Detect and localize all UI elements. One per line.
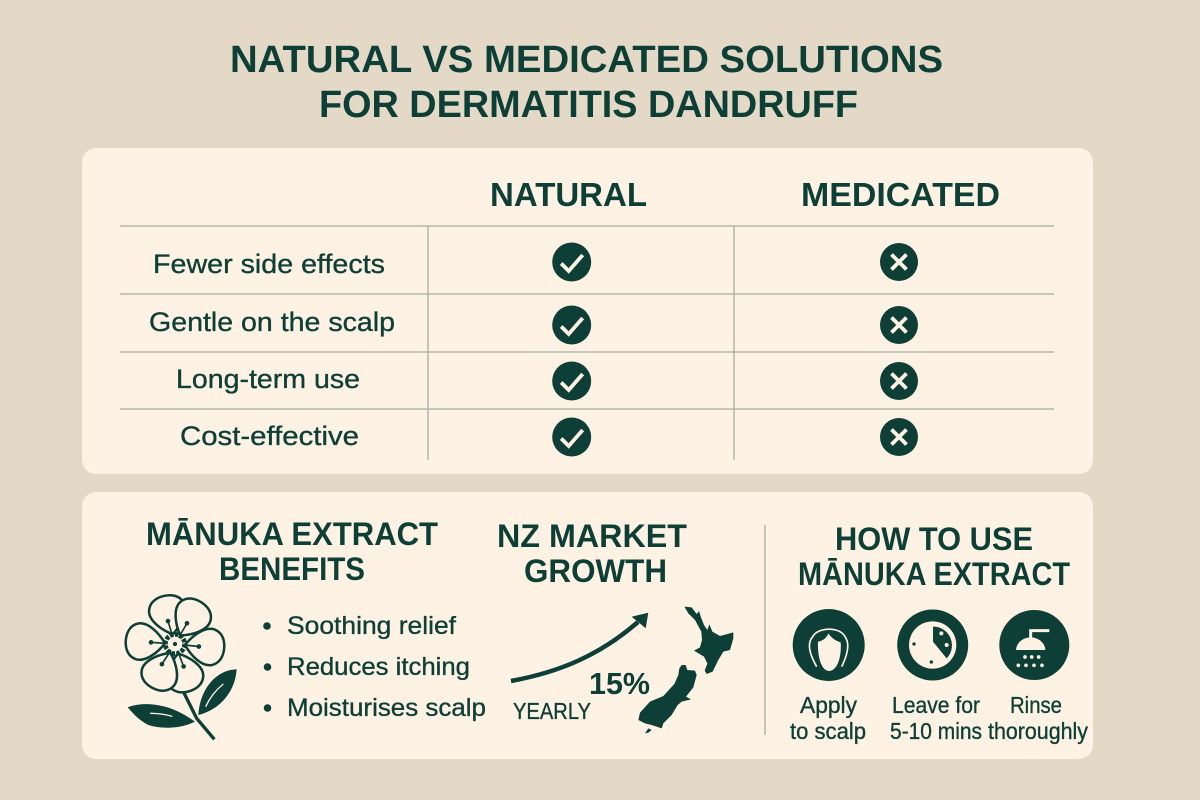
step: leave for 5-10 mins (890, 610, 982, 744)
row: gentle on the scalp: Gentle on the scalp (149, 307, 395, 337)
panel: bottom section (82, 492, 1093, 759)
row: fewer side effects: Fewer side effects (153, 249, 385, 279)
list: benefits: Reduces itching (287, 653, 470, 681)
heading: how to use manuka extract: MĀNUKA EXTRACT (798, 556, 1070, 592)
title: FOR DERMATITIS DANDRUFF (319, 84, 858, 126)
column heading: medicated: MEDICATED (801, 176, 1000, 213)
arrow: growth (511, 613, 648, 681)
step: rinse thoroughly: thoroughly (988, 718, 1088, 744)
row: cost-effective (180, 418, 918, 456)
list: benefits: Soothing relief (287, 612, 456, 640)
list: benefits: Moisturises scalp (287, 694, 486, 722)
label: yearly: YEARLY (513, 698, 591, 724)
row: long-term use (176, 362, 918, 400)
heading: nz market growth: NZ MARKET (497, 518, 687, 554)
heading: nz market growth: GROWTH (524, 553, 667, 589)
step: rinse thoroughly (988, 610, 1088, 744)
heading: how to use manuka extract: HOW TO USE (835, 521, 1033, 557)
step: apply to scalp: to scalp (790, 718, 866, 744)
step: rinse thoroughly: Rinse (1010, 692, 1062, 718)
step: leave for 5-10 mins: Leave for (892, 692, 980, 718)
row: fewer side effects (153, 242, 918, 282)
heading: manuka extract benefits: BENEFITS (219, 551, 365, 587)
step: apply to scalp: Apply (800, 692, 857, 718)
step: leave for 5-10 mins: 5-10 mins (890, 718, 982, 744)
row: gentle on the scalp (149, 306, 918, 344)
heading: nz market growth (497, 518, 687, 589)
heading: how to use manuka extract (798, 521, 1070, 592)
stat: 15%: 15% (589, 666, 650, 701)
row: long-term use: Long-term use (176, 364, 360, 394)
icon: manuka flower (125, 592, 237, 739)
row: cost-effective: Cost-effective (180, 421, 359, 451)
title (230, 39, 943, 126)
column heading: natural: NATURAL (490, 176, 647, 213)
heading: manuka extract benefits (146, 516, 438, 587)
heading: manuka extract benefits: MĀNUKA EXTRACT (146, 516, 438, 552)
panel: comparison table (82, 148, 1093, 474)
title: NATURAL VS MEDICATED SOLUTIONS (230, 39, 943, 81)
step: apply to scalp (790, 609, 866, 744)
icon: new zealand map (638, 607, 733, 733)
list: benefits (263, 612, 486, 722)
